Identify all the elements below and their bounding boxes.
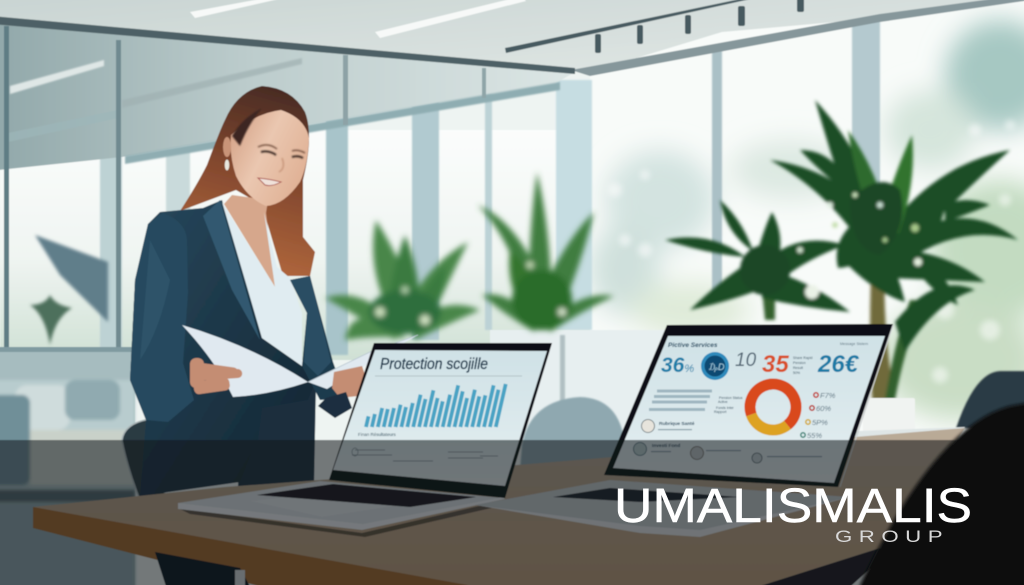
display [613,336,885,483]
earring [225,160,229,170]
table [33,428,965,585]
chair right background [956,371,1024,430]
screen sub-table [352,448,498,461]
outdoor foliage [590,20,1024,420]
ear [223,137,231,157]
window mullions [100,20,880,355]
screen small caption: Finan Résultateurs [358,432,397,437]
blouse [222,202,302,366]
bar chart [366,384,506,427]
dark overlay band [0,440,1024,585]
table leg [235,570,245,585]
small note: Fonds Inter [716,406,735,410]
jacket right side [290,276,346,400]
table far edge light [625,427,965,470]
bottom item health: Rubrique Santé [659,421,695,427]
top right label: Message Sistem [840,342,868,346]
right lapel [290,276,331,376]
stat 26€: 26€ [817,351,860,378]
glass partition reflection [0,15,575,516]
legend: 55% [807,431,822,440]
screen title: Protection scojille [380,356,488,373]
paper fold shadow [308,335,418,382]
donut chart [750,384,796,430]
logo subtitle: GROUP [835,528,949,546]
bottom items [634,442,822,463]
left lapel [203,200,260,340]
stat note: Share Rapid [793,356,813,360]
small note: Active [718,400,728,404]
bezel [604,324,893,487]
stat ring: ₯D [708,362,725,372]
screen bezel [329,343,552,498]
hair [180,86,315,276]
screen display [333,350,547,486]
grey text rows [649,390,712,411]
logo [614,480,972,546]
keyboard [257,484,476,507]
right cuff [318,392,352,418]
keyboard [553,488,740,502]
smile [258,178,281,186]
jacket body [130,200,317,496]
woman [130,86,418,496]
trackpad [250,492,402,517]
ceiling lights [190,0,526,38]
right hand [332,366,366,398]
stat ring [701,352,729,380]
mid-ground plants [325,172,614,340]
stat 10: 10 [735,350,757,371]
logo wordmark: UMALISMALIS [614,480,972,533]
eyes and brows [258,145,305,172]
big palm plants [665,100,1018,400]
papers [182,325,418,397]
stat note: 50% [793,371,800,375]
low white wall [490,330,670,440]
left hand [190,358,243,395]
divider [375,375,522,377]
track lighting [505,0,804,53]
bokeh highlights [608,120,1015,383]
hair temple shadow [232,108,262,146]
dashboard title: Pictive Services [668,342,718,349]
neck [224,195,275,287]
shadow [178,500,505,537]
bottom item health [642,420,695,432]
left lounge background [0,235,135,585]
stat 36%: 36% [661,354,694,377]
plant pot [863,398,915,443]
chair behind woman [122,418,165,505]
legend: 5P% [812,418,828,427]
laptop base [178,481,503,527]
chair behind table [520,397,625,470]
palm fronds [665,100,1018,352]
left sleeve [130,213,194,422]
woman's legs below table [155,552,260,585]
legend [801,391,836,440]
trousers [238,385,316,492]
stat note: Result [793,366,803,370]
legend: F7% [820,391,836,400]
laptop right [475,324,893,537]
foreground chair [860,400,1024,585]
stat note: Pension [793,361,806,365]
ceiling [0,0,1024,76]
base [475,480,850,534]
small note: Pension Status [719,396,743,400]
laptop left [178,343,552,537]
bottom items: Investi Fond [652,443,680,449]
face [231,110,309,206]
legend: 60% [816,404,831,413]
stat 35: 35 [762,351,789,378]
small note: Rapport [714,410,726,414]
